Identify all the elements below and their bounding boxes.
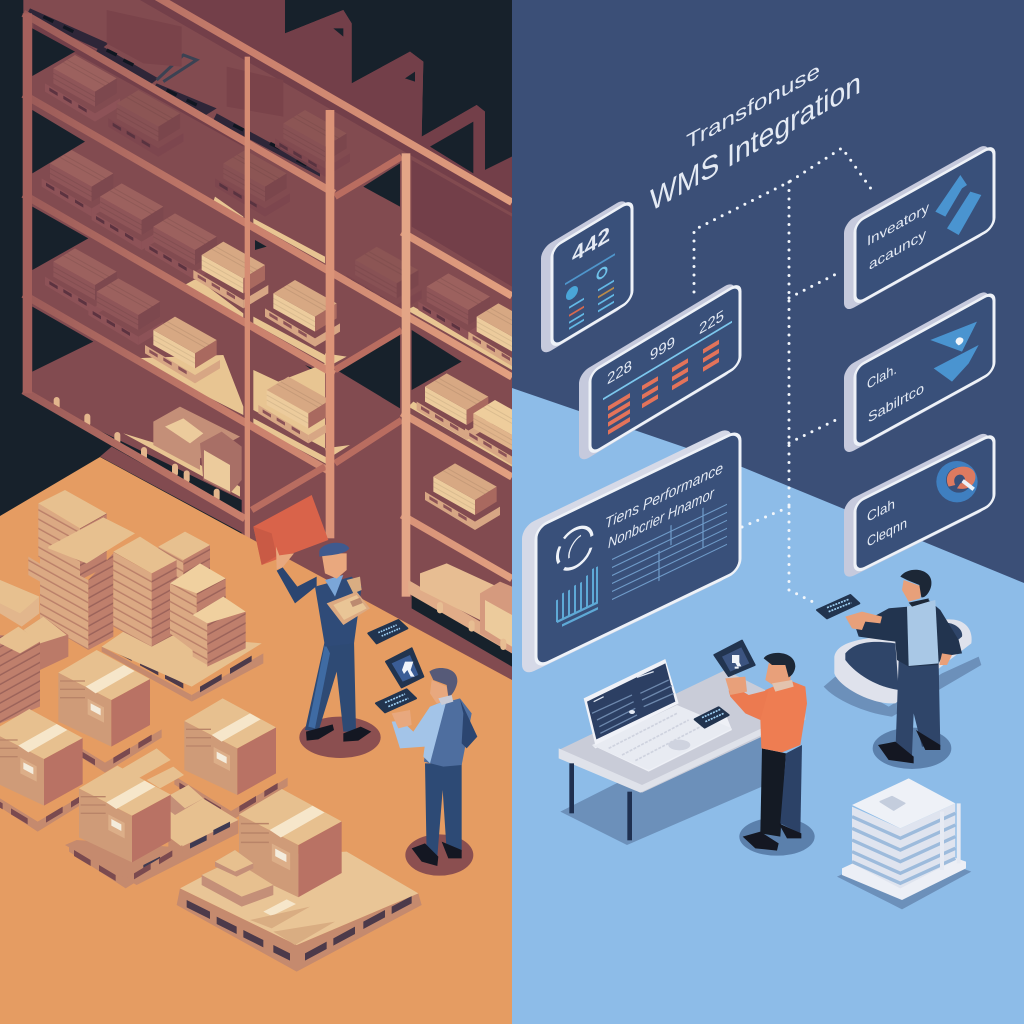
panel: performance dashboard: Nonbcrier Hnamor — [608, 485, 715, 552]
lit shelf floors — [123, 197, 512, 497]
panel: inventory accuracy — [844, 139, 994, 313]
upright posts — [23, 13, 410, 597]
person in vest — [845, 570, 962, 769]
title: WMS Integration — [650, 65, 861, 219]
orange bars — [608, 340, 719, 435]
shelf back wall — [23, 0, 512, 700]
horizontal rails — [23, 0, 512, 579]
desk — [559, 670, 805, 845]
connector: dotted network lines — [694, 148, 874, 605]
bar chart — [557, 566, 598, 628]
handheld on desk — [695, 707, 729, 728]
bottom-bay boxes — [57, 400, 242, 498]
red carton — [253, 495, 328, 565]
front pallet — [177, 789, 422, 972]
person in orange — [725, 653, 815, 856]
upper storage shade — [33, 0, 512, 287]
laptop — [584, 659, 732, 772]
panel: 442 metric card — [541, 194, 632, 357]
panel: client satisfaction — [844, 286, 994, 456]
panel: client clean — [844, 428, 994, 580]
panel: office scene — [559, 570, 981, 909]
lit pallets — [465, 400, 540, 467]
under-shelf gap — [100, 447, 243, 533]
title: Transfonuse — [686, 58, 820, 155]
label: Inveatory — [867, 199, 929, 250]
panel: performance dashboard — [522, 422, 740, 677]
lower right shelf — [408, 563, 512, 667]
handheld scanner devices — [368, 620, 423, 712]
top conveyor — [26, 8, 320, 177]
pod seat — [824, 619, 981, 717]
panel: 228 999 225 metric card — [579, 277, 740, 464]
partly lit mid pallets — [145, 242, 543, 530]
worker with tablet — [392, 668, 477, 876]
value: 442 — [572, 221, 610, 268]
cartons on pallets — [0, 650, 288, 888]
stacked pallet with tall stacks — [0, 490, 263, 723]
label — [867, 491, 907, 551]
panel: warehouse shelving — [23, 0, 543, 700]
icon: target gauge — [936, 461, 978, 502]
scanner card — [817, 595, 859, 618]
server stack — [837, 778, 971, 909]
background: left dark wall — [0, 0, 512, 1024]
values: 228 — [607, 357, 632, 388]
label: acauncy — [869, 226, 926, 274]
icon: blue heart arrows — [930, 322, 979, 382]
handheld tablet — [714, 641, 755, 676]
warehouse floor — [0, 457, 512, 1024]
dark gaps through the shelf — [32, 28, 473, 408]
label — [867, 346, 924, 427]
worker with cap — [276, 543, 381, 758]
icon: blue chevrons — [935, 175, 981, 235]
values — [607, 302, 724, 393]
label — [867, 199, 929, 275]
values: 999 — [650, 333, 675, 365]
gauge icon — [557, 521, 592, 576]
panel: right dark wall — [512, 0, 1024, 600]
heading: Tiens Performance — [605, 460, 723, 533]
cross beams — [252, 157, 402, 510]
values: 225 — [699, 307, 724, 338]
data table — [612, 496, 727, 604]
right light floor — [512, 388, 1024, 1024]
label: Cleqnn — [867, 516, 907, 551]
label: Clah. — [867, 361, 897, 393]
mini gauges and lines — [565, 254, 615, 331]
label: Sabilrtco — [868, 380, 924, 427]
panel: floor stock and workers — [0, 490, 512, 972]
label: Clah — [867, 497, 895, 526]
dark pallets on upper shelves — [42, 55, 493, 345]
faded boxes in the upper bays — [108, 90, 422, 313]
